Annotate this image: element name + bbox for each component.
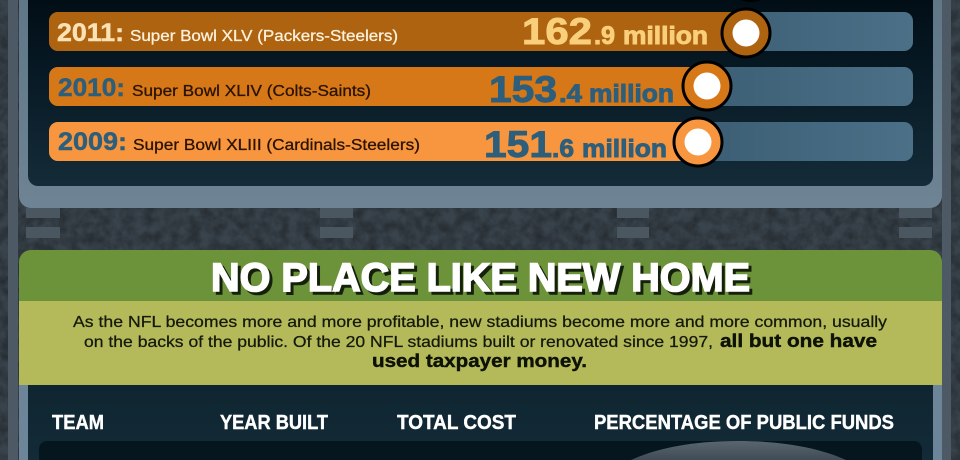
intro line 1: As the NFL becomes more and more profitable, new stadiums become more and more common, usually (73, 314, 887, 331)
title: NO PLACE LIKE NEW HOME (211, 256, 750, 300)
game label 2009: Super Bowl XLIII (Cardinals-Steelers) (133, 137, 420, 154)
value 162.9 million: 162 (522, 11, 592, 52)
value 162.9 million: million (623, 22, 708, 50)
heading band (19, 250, 942, 303)
value 151.6 million (484, 124, 667, 165)
year label 2010: 2010: (58, 74, 125, 102)
panel: stadium section (19, 250, 942, 460)
value 151.6 million: .6 (552, 135, 574, 163)
year label 2011: 2011: (57, 19, 124, 47)
game label 2011: Super Bowl XLV (Packers-Steelers) (130, 28, 398, 45)
intro line 2 emphasis: all but one have (720, 331, 877, 351)
bar: 2010 Super Bowl XLIV (49, 62, 913, 110)
stadium illustration (631, 441, 846, 460)
value 153.4 million (489, 69, 674, 110)
value 153.4 million: 153 (489, 69, 557, 110)
intro line 2: on the backs of the public. Of the 20 NFL stadiums built or renovated since 1997, (84, 334, 713, 351)
bar: 2011 Super Bowl XLV (49, 9, 913, 57)
bar: 2009 Super Bowl XLIII (49, 118, 913, 166)
panel: viewership chart (19, 0, 942, 208)
intro line 3 emphasis: used taxpayer money. (372, 351, 587, 371)
table header: total cost: TOTAL COST (397, 412, 516, 434)
title shadow: NO PLACE LIKE NEW HOME (214, 259, 753, 303)
table header: team: TEAM (52, 412, 104, 434)
value 153.4 million: million (589, 80, 674, 108)
table header: year built: YEAR BUILT (220, 412, 328, 434)
value 151.6 million: million (582, 135, 667, 163)
marker 2009 (674, 118, 722, 166)
intro text band (19, 301, 942, 385)
game label 2010: Super Bowl XLIV (Colts-Saints) (132, 83, 371, 100)
table body (39, 441, 922, 460)
table header: percentage of public funds: PERCENTAGE OF PUBLIC FUNDS (594, 412, 894, 434)
year label 2009: 2009: (58, 128, 127, 156)
value 162.9 million (522, 11, 708, 52)
marker 2011 (722, 9, 770, 57)
marker 2010 (683, 62, 731, 110)
value 151.6 million: 151 (484, 124, 552, 165)
value 153.4 million: .4 (559, 80, 582, 108)
value 162.9 million: .9 (594, 22, 615, 50)
